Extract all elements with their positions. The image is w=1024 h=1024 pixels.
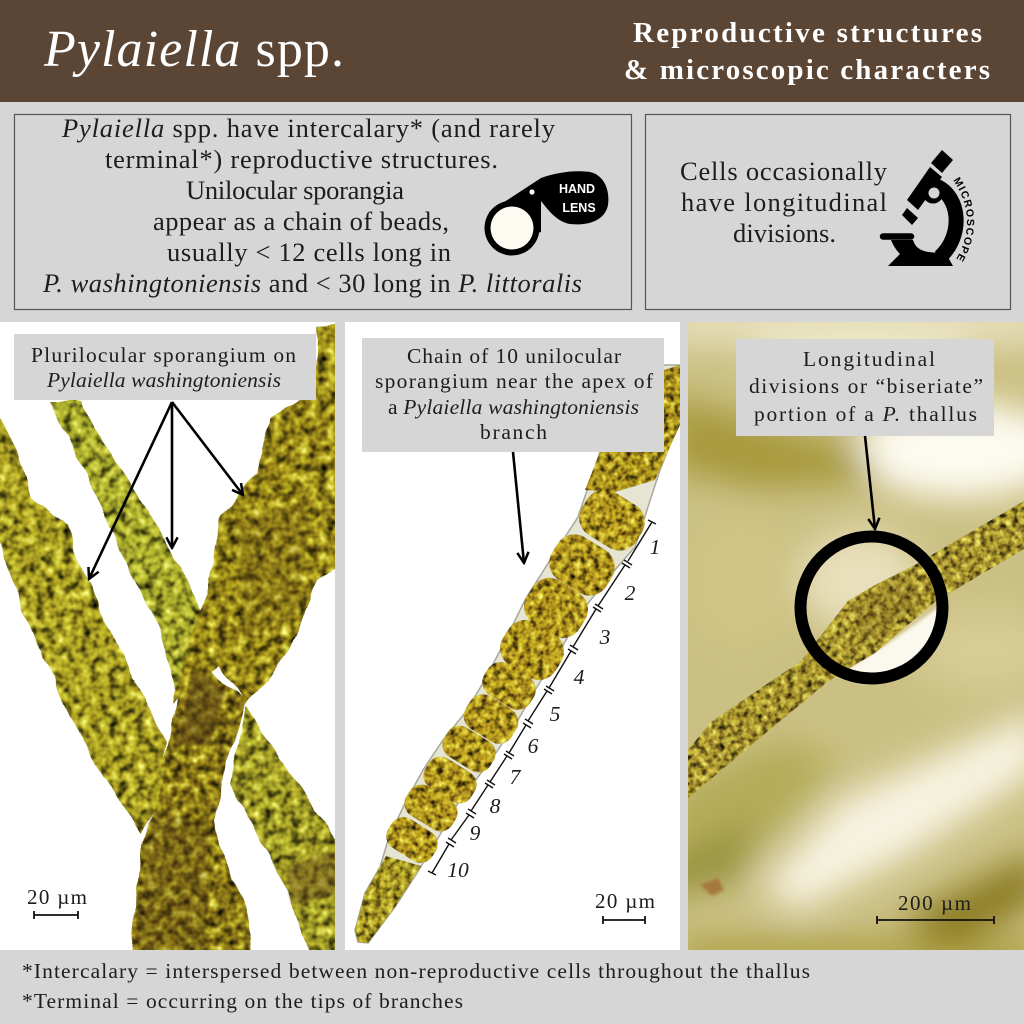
callout circle	[800, 536, 942, 678]
scale bar: 20 µm	[596, 894, 655, 924]
cell count numbers: 4	[574, 665, 585, 689]
filament: top right stub	[314, 324, 335, 401]
arrows	[89, 402, 243, 579]
panel: plurilocular sporangium photo	[0, 322, 345, 960]
text block: reproductive structures: appear as a chain of beads,	[153, 206, 449, 236]
subtitle	[624, 17, 990, 86]
subtitle: Reproductive structures	[633, 17, 982, 49]
icon: microscope	[880, 150, 974, 266]
icon: hand lens: LENS	[562, 201, 596, 215]
text block: cells: have longitudinal	[681, 187, 887, 217]
arrow	[865, 436, 875, 529]
label: plurilocular sporangium: Pylaiella washingtoniensis	[46, 368, 281, 392]
footnotes: *Terminal = occurring on the tips of branches	[22, 989, 463, 1013]
filament	[688, 501, 1024, 798]
filament: lower centre dark	[130, 660, 250, 960]
panel: unilocular sporangia chain photo	[345, 322, 680, 950]
biseriate shading	[850, 572, 925, 645]
cell count numbers: 5	[550, 702, 561, 726]
filament: middle thin	[50, 402, 210, 705]
footnotes	[22, 959, 810, 1013]
text block: reproductive structures: terminal*) reproductive structures.	[105, 144, 498, 174]
label: plurilocular sporangium: Plurilocular sporangium on	[31, 343, 296, 367]
header band	[0, 0, 1024, 102]
debris	[700, 878, 724, 896]
label: chain of unilocular sporangia	[362, 338, 664, 452]
panel: reproductive structures text box	[14, 113, 632, 310]
label: chain of unilocular sporangia: sporangium near the apex of	[375, 369, 654, 393]
text block: cells	[680, 156, 888, 248]
scale bar: 20 µm: 20 µm	[595, 889, 655, 913]
white patch behind filament	[848, 606, 940, 683]
label: longitudinal divisions: portion of a P. thallus	[754, 402, 977, 426]
label: chain of unilocular sporangia: a Pylaiella washingtoniensis	[388, 395, 639, 419]
cell count numbers: 2	[625, 581, 636, 605]
filament: lower right	[230, 704, 335, 950]
icon: hand lens: HAND	[559, 182, 595, 196]
footnotes: *Intercalary = interspersed between non-reproductive cells throughout the thallus	[22, 959, 810, 983]
scale bar: 20 µm	[28, 890, 87, 919]
cell count numbers: 10	[447, 858, 469, 882]
subtitle: & microscopic characters	[624, 54, 990, 86]
panel: biseriate thallus photo	[688, 322, 1024, 950]
text block: reproductive structures: Unilocular sporangia	[186, 175, 404, 205]
label: longitudinal divisions	[736, 339, 994, 436]
text block: cells: divisions.	[733, 218, 836, 248]
text block: reproductive structures	[42, 113, 582, 298]
scale bar: 20 µm: 20 µm	[27, 885, 87, 909]
icon: microscope: MICROSCOPE	[954, 176, 974, 262]
label: chain of unilocular sporangia: Chain of 10 unilocular	[407, 344, 621, 368]
filament: cells	[355, 365, 680, 943]
text block: reproductive structures: Pylaiella spp. have intercalary* (and rarely	[61, 113, 556, 143]
cell count numbers: 1	[650, 535, 660, 559]
icon: hand lens	[484, 171, 608, 256]
scale bar: 200 µm: 200 µm	[898, 891, 971, 915]
text block: cells: Cells occasionally	[680, 156, 888, 186]
scale bar: 200 µm	[876, 896, 995, 924]
filament: left	[0, 390, 167, 835]
blurred background	[688, 322, 1024, 950]
text block: reproductive structures: P. washingtoniensis and < 30 long in P. littoralis	[42, 268, 582, 298]
dark overlap shading	[175, 668, 225, 745]
filament: upper right large	[173, 400, 345, 705]
cell count numbers	[447, 535, 660, 882]
text block: reproductive structures: usually < 12 cells long in	[167, 237, 451, 267]
cell count numbers: 9	[470, 821, 481, 845]
label: longitudinal divisions: Longitudinal	[803, 347, 935, 371]
filaments	[0, 322, 345, 960]
filament: membrane	[355, 365, 680, 943]
panel: longitudinal divisions text box	[644, 114, 1012, 310]
cell count numbers: 6	[528, 734, 539, 758]
title: Pylaiella spp.	[43, 21, 344, 78]
cell count numbers: 3	[599, 625, 610, 649]
label: chain of unilocular sporangia: branch	[480, 420, 547, 444]
cell count ruler	[428, 520, 656, 875]
cell count numbers: 8	[490, 794, 501, 818]
cell count numbers: 7	[510, 765, 522, 789]
label: longitudinal divisions: divisions or “biseriate”	[749, 374, 983, 398]
cross bands on filament	[690, 525, 1024, 775]
label: plurilocular sporangium	[14, 334, 316, 400]
arrow	[513, 452, 524, 563]
